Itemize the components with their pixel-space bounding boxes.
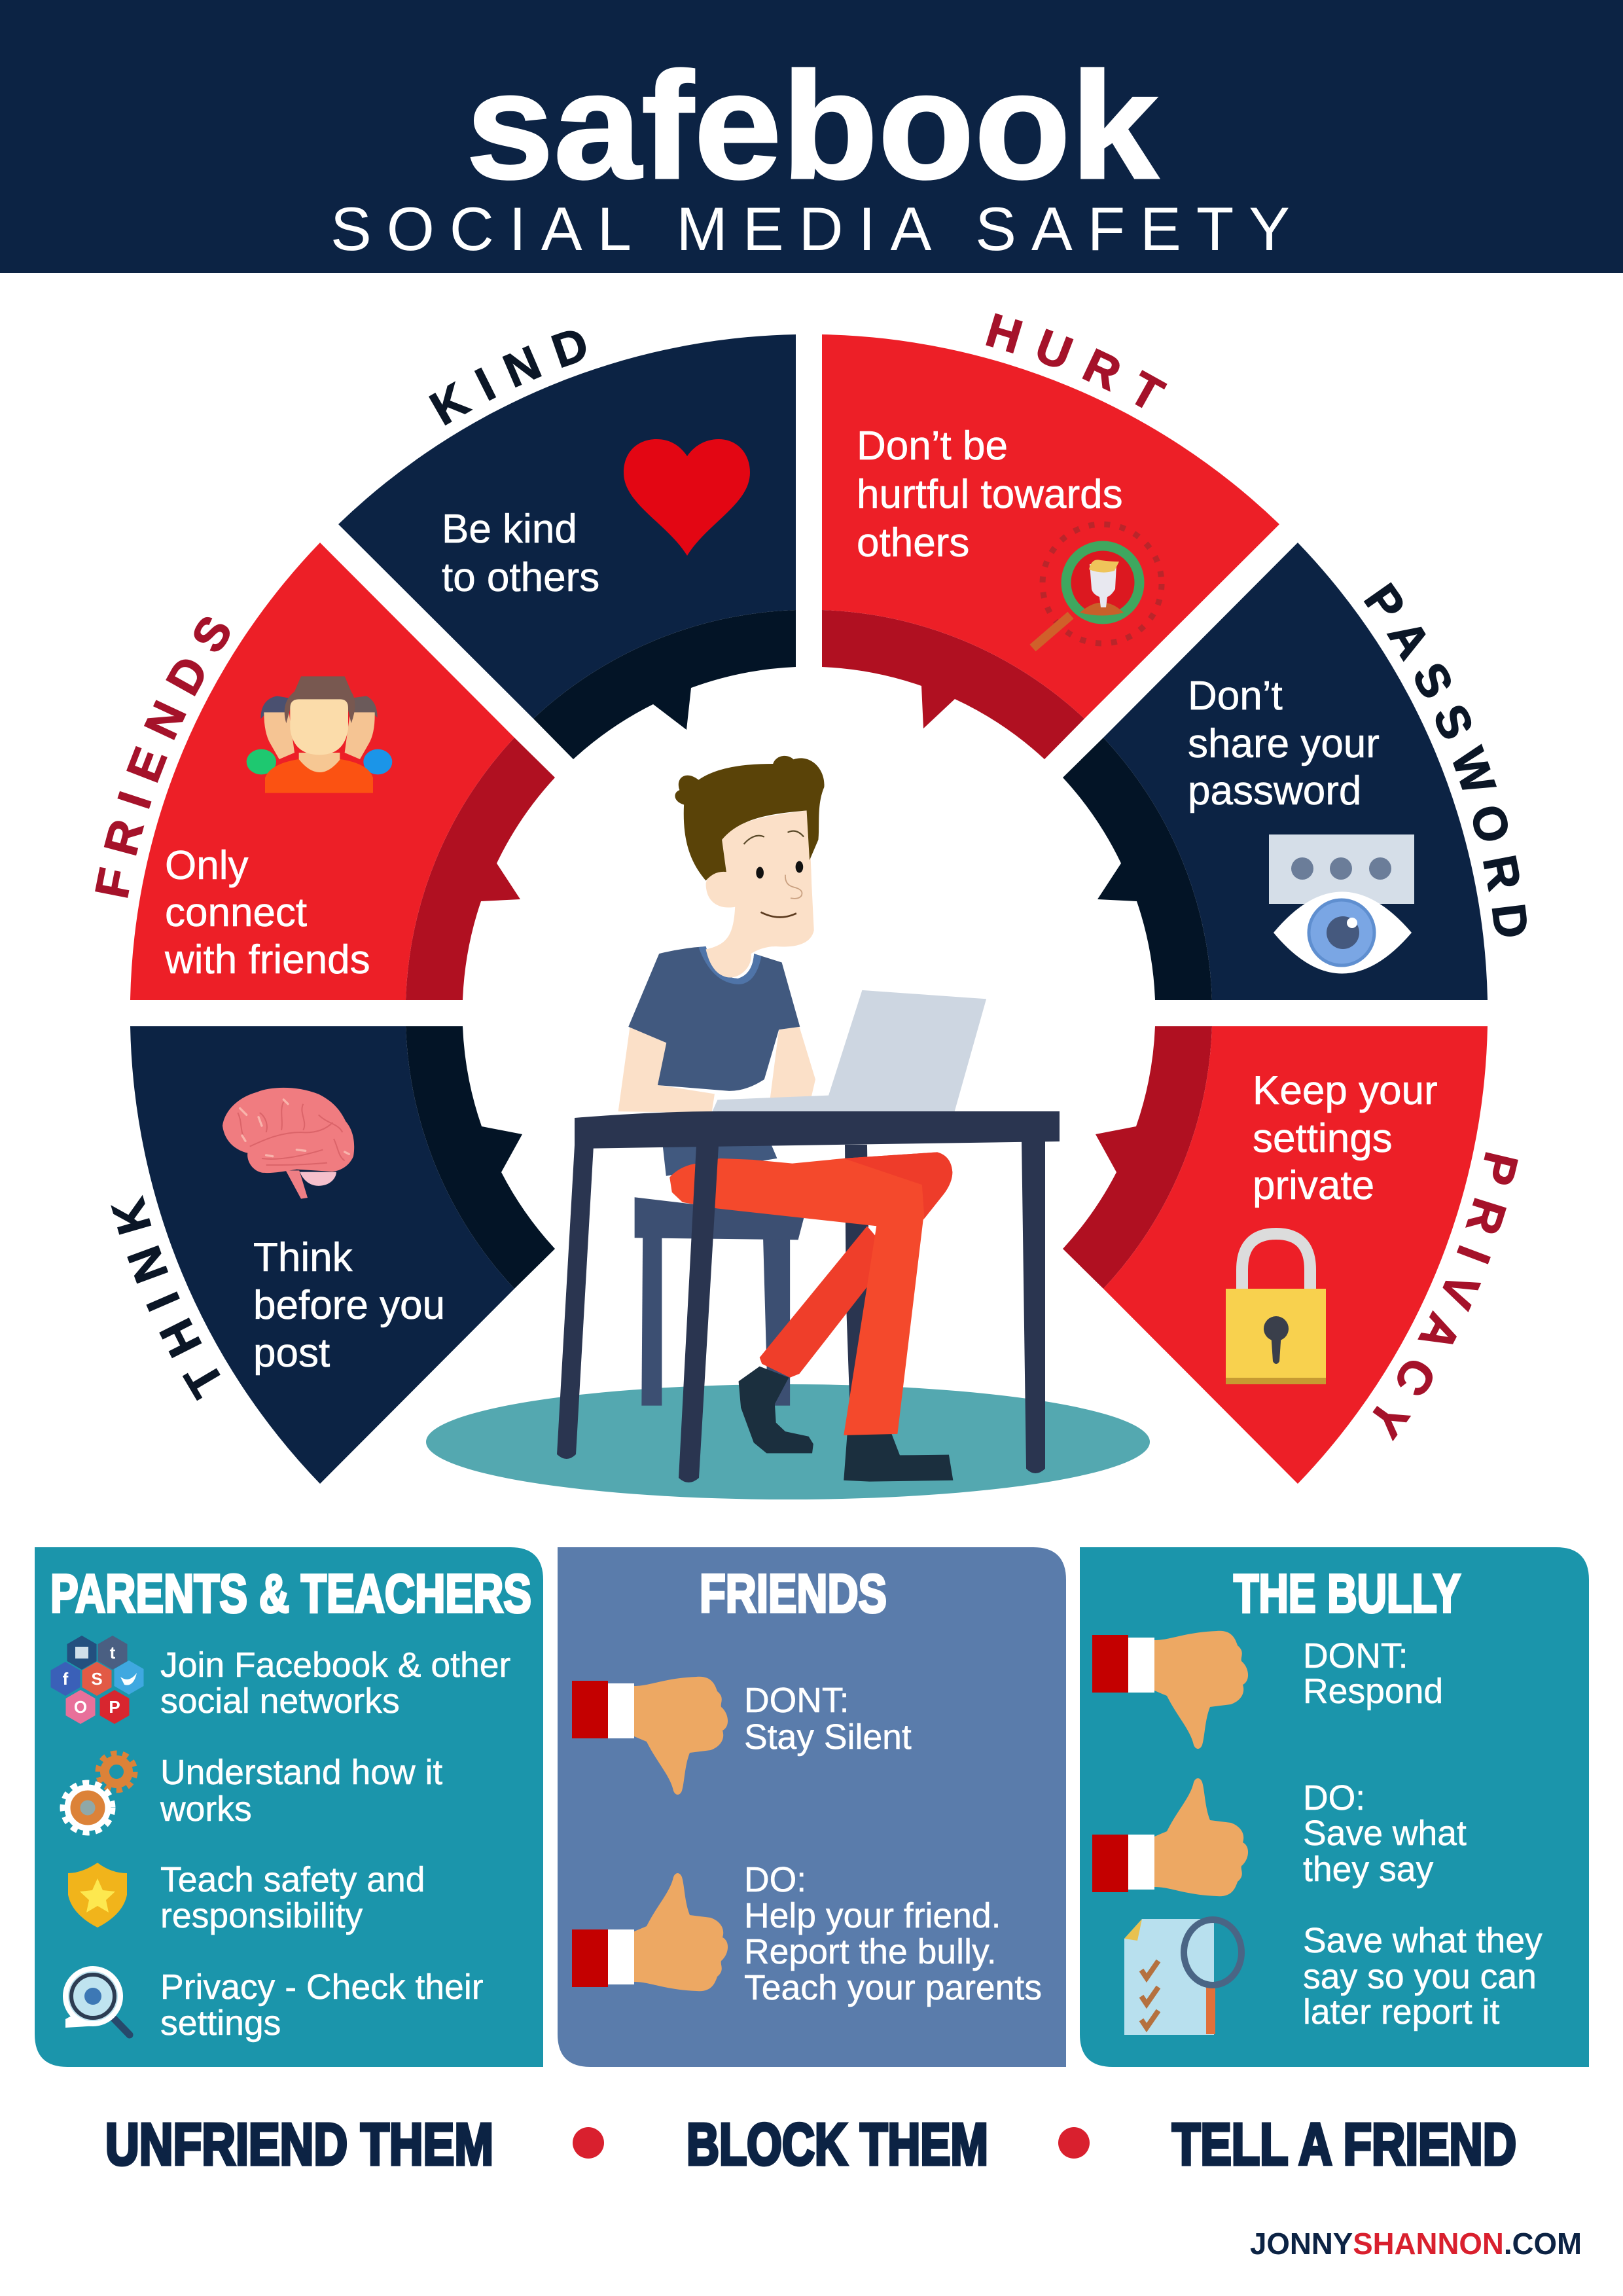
shirt under desk xyxy=(662,1145,777,1176)
illustration: man at desk xyxy=(426,756,1150,1499)
footer credit: JONNYSHANNON.COM xyxy=(1250,2227,1582,2261)
hurt text: hurtful towards xyxy=(857,472,1123,517)
bully dont text: DONT: xyxy=(1303,1637,1408,1676)
panel: think xyxy=(111,1026,555,1484)
parents item 3: responsibility xyxy=(160,1897,363,1935)
back desk leg xyxy=(845,1145,870,1400)
icon: social network hexagons: O xyxy=(74,1697,87,1717)
hair xyxy=(675,756,825,881)
icon: thumb down xyxy=(1092,1631,1248,1749)
header band xyxy=(0,0,1623,273)
face details xyxy=(756,867,764,878)
icon: privacy magnifier xyxy=(65,1969,130,2035)
panel: parents and teachers xyxy=(35,1547,543,2067)
kind heading: KIND xyxy=(429,331,586,425)
parents heading: PARENTS & TEACHERS xyxy=(50,1563,531,1624)
parents item 1: Join Facebook & other xyxy=(160,1646,510,1685)
friends do text: Help your friend. xyxy=(744,1897,1001,1935)
kind text: Be kind xyxy=(442,507,577,552)
bully do text: DO: xyxy=(1303,1779,1365,1818)
chair xyxy=(635,1197,804,1406)
icon: gears xyxy=(63,1753,135,1833)
icon: thumb down xyxy=(572,1677,728,1795)
bully do text: Save what xyxy=(1303,1814,1467,1853)
parents item 4: settings xyxy=(160,2004,281,2043)
panel: friends xyxy=(95,543,555,1000)
icon: brain xyxy=(223,1088,354,1199)
friends heading: FRIENDS xyxy=(95,617,230,898)
icon: heart xyxy=(624,439,750,556)
icon: checklist with magnifier xyxy=(1124,1919,1241,2035)
front shoe xyxy=(844,1434,953,1482)
friends do text: Teach your parents xyxy=(744,1969,1042,2007)
bully heading: THE BULLY xyxy=(1234,1563,1461,1624)
title: safebook xyxy=(466,41,1159,211)
bully dont text: Respond xyxy=(1303,1672,1443,1711)
icon: social network hexagons xyxy=(51,1636,144,1724)
friends do text: DO: xyxy=(744,1861,806,1899)
head xyxy=(706,810,814,978)
action: block: BLOCK THEM xyxy=(687,2112,988,2178)
bully do text: they say xyxy=(1303,1850,1433,1889)
password text: Don’t xyxy=(1188,673,1283,719)
friends advice heading: FRIENDS xyxy=(700,1563,887,1624)
icon: password eye xyxy=(1269,834,1414,974)
icon: social network hexagons: f xyxy=(63,1669,69,1689)
parents item 4: Privacy - Check their xyxy=(160,1968,484,2007)
panel: password xyxy=(1063,543,1527,1000)
friends text: with friends xyxy=(164,937,370,982)
password text: password xyxy=(1188,768,1361,814)
front trouser leg xyxy=(669,1152,952,1435)
hurt text: Don’t be xyxy=(857,423,1008,469)
think heading: THINK xyxy=(111,1195,221,1401)
friends do text: Report the bully. xyxy=(744,1933,997,1971)
panel: hurt xyxy=(822,313,1279,759)
icon: thumb up xyxy=(572,1873,728,1991)
laptop xyxy=(711,990,986,1113)
action: tell a friend: TELL A FRIEND xyxy=(1172,2112,1516,2178)
icon: thumb up xyxy=(1092,1778,1248,1896)
t-shirt xyxy=(628,946,800,1091)
dot xyxy=(573,2127,604,2159)
password heading: PASSWORD xyxy=(1364,583,1527,937)
think text: Think xyxy=(253,1235,353,1280)
icon: padlock xyxy=(1226,1234,1326,1384)
think text: post xyxy=(253,1331,330,1376)
dot xyxy=(1058,2127,1090,2159)
back trouser leg xyxy=(760,1226,879,1378)
panel: privacy xyxy=(1063,1026,1518,1484)
privacy heading: PRIVACY xyxy=(1372,1152,1518,1441)
hurt text: others xyxy=(857,520,969,565)
friends dont text: Stay Silent xyxy=(744,1718,912,1757)
person upper body xyxy=(618,756,986,1113)
friends dont text: DONT: xyxy=(744,1681,849,1720)
bully save text: say so you can xyxy=(1303,1958,1537,1996)
friends text: Only xyxy=(165,843,248,888)
privacy text: Keep your xyxy=(1253,1068,1438,1113)
privacy text: settings xyxy=(1253,1116,1393,1161)
password text: share your xyxy=(1188,721,1380,766)
action strip xyxy=(105,2112,1516,2178)
icon: social network hexagons: P xyxy=(109,1697,120,1717)
parents item 2: Understand how it xyxy=(160,1753,442,1792)
think text: before you xyxy=(253,1283,445,1328)
hurt heading: HURT xyxy=(986,313,1168,408)
bully save text: later report it xyxy=(1303,1993,1499,2032)
arms xyxy=(618,1027,715,1113)
parents item 2: works xyxy=(160,1790,252,1829)
panel: kind xyxy=(338,331,796,759)
back shoe xyxy=(739,1367,813,1453)
panel: friends advice xyxy=(558,1547,1066,2067)
panel: the bully xyxy=(1080,1547,1589,2067)
floor ellipse xyxy=(426,1384,1150,1499)
icon: social network hexagons: S xyxy=(91,1669,103,1689)
icon: group of friends xyxy=(247,676,392,793)
friends text: connect xyxy=(165,890,307,935)
icon: shield xyxy=(68,1863,127,1928)
bully save text: Save what they xyxy=(1303,1922,1543,1960)
parents item 1: social networks xyxy=(160,1682,400,1721)
kind text: to others xyxy=(442,555,599,600)
lower body, chair and desk leg xyxy=(635,1145,953,1482)
privacy text: private xyxy=(1253,1163,1374,1208)
icon: magnifier xyxy=(1033,524,1162,648)
action: unfriend: UNFRIEND THEM xyxy=(105,2112,493,2178)
parents item 3: Teach safety and xyxy=(160,1861,425,1899)
subtitle: SOCIAL MEDIA SAFETY xyxy=(330,194,1290,263)
icon: social network hexagons: t xyxy=(110,1643,116,1662)
desk xyxy=(557,1111,1060,1482)
